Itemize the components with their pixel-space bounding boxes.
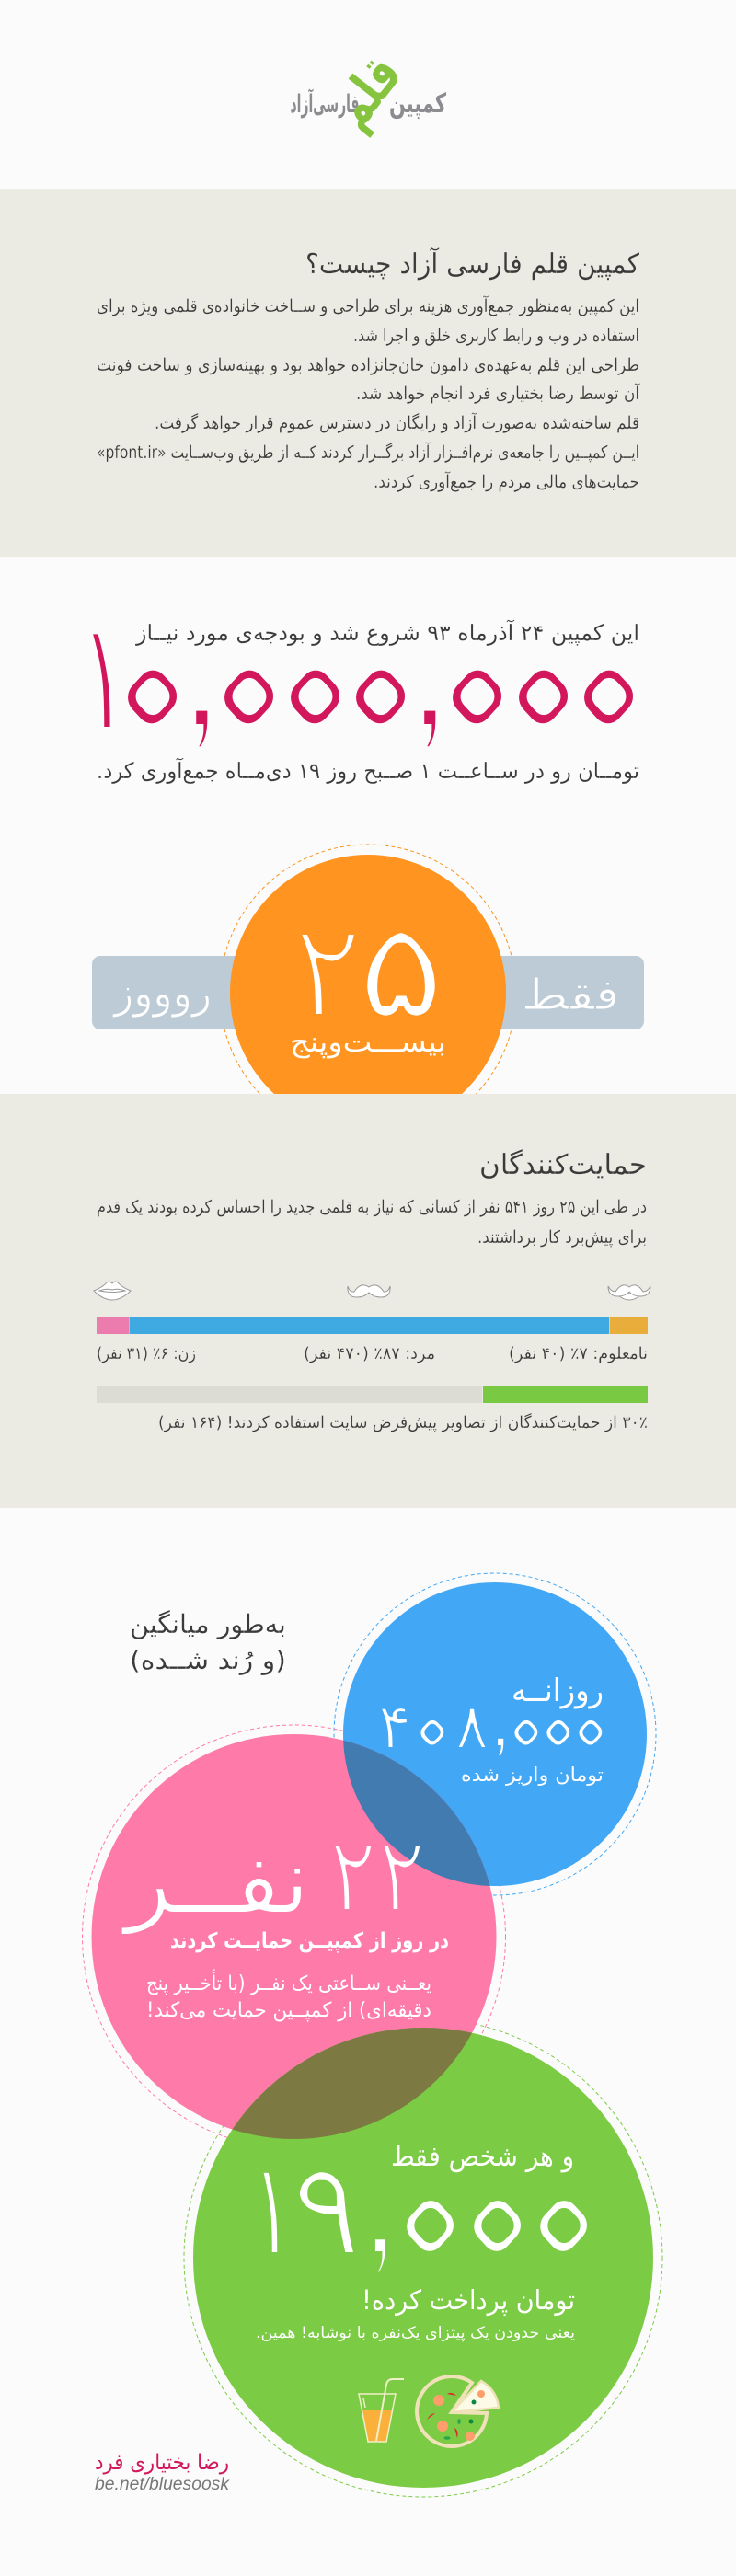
- heading: on average: [130, 1609, 286, 1675]
- number: 25: [302, 933, 435, 1016]
- panel: what is the campaign: [0, 189, 736, 557]
- number: 408,000: [378, 1676, 625, 1764]
- heading: on average: به‌طور میانگین: [130, 1609, 286, 1639]
- big number: ten million: ۱: [75, 587, 133, 767]
- text block: per person: تومان پرداخت کرده!: [362, 2284, 575, 2317]
- big number: ten million: ۰: [546, 618, 681, 765]
- number: 408,000: ۰: [561, 1696, 625, 1764]
- icon: drink: [359, 2379, 404, 2442]
- big number: ten million: ۰: [317, 618, 453, 765]
- text block: campaign description: آن توسط رضا بختیاری فرد انجام خواهد شد.: [356, 382, 640, 404]
- icon: moustache and lips: [608, 1285, 650, 1300]
- text block: collection date: تومــان رو در ســاعــت ۱ صــبح روز ۱۹ دی‌مــاه جمع‌آوری کرد.: [97, 757, 639, 784]
- legend: gender labels: نامعلوم: ۷٪ (۴۰ نفر): [509, 1344, 648, 1363]
- text block: campaign description: این کمپین به‌منظور جمع‌آوری هزینه برای طراحی و ســاخت خانواده‌ی قلمی ویژه برای: [97, 294, 639, 316]
- logo: فارسی‌آزاد: [291, 88, 359, 119]
- label: days: روووز: [112, 968, 212, 1018]
- logo: [291, 43, 446, 140]
- big number: ten million: ,: [406, 569, 454, 765]
- big number: ten million: ۰: [89, 618, 224, 765]
- number: 25: ۵: [356, 893, 446, 1048]
- number: 408,000: ۰: [497, 1696, 560, 1764]
- text block: campaign description: قلم ساخته‌شده به‌صورت آزاد و رایگان در دسترس عموم قرار خواهد گرفت.: [155, 411, 639, 433]
- text block: daily supporters: نفــر: [121, 1827, 310, 1935]
- overlap: pink and green: [232, 2028, 472, 2139]
- text block: daily supporters: در روز از کمپیــن حمایــت کردند: [170, 1929, 449, 1953]
- credit: author: be.net/bluesoosk: [95, 2475, 231, 2494]
- text block: per person: یعنی حدودن یک پیتزای یک‌نفره با نوشابه! همین.: [256, 2324, 575, 2342]
- number: 408,000: ۸: [455, 1691, 489, 1764]
- circle: daily supporters: [92, 1734, 497, 2139]
- text block: per person: [251, 2110, 633, 2342]
- legend: gender labels: مرد: ۸۷٪ (۴۷۰ نفر): [304, 1344, 435, 1363]
- text block: supporters description: برای پیش‌برد کار برداشتند.: [477, 1227, 647, 1248]
- text block: daily supporters: دقیقه‌ای) از کمپــین حمایت می‌کند!: [146, 1999, 431, 2022]
- text block: daily supporters: یعــنی ســاعتی یک نفــر (با تأخــیر پنج: [146, 1969, 431, 1995]
- number: 408,000: ۰: [529, 1696, 592, 1764]
- circle: daily amount: [343, 1582, 647, 1886]
- text block: daily amount: [378, 1673, 625, 1786]
- text block: campaign description: حمایت‌های مالی مردم را جمع‌آوری کردند.: [374, 470, 639, 492]
- heading: supporters: حمایت‌کنندگان: [479, 1149, 647, 1181]
- circle: per person: [193, 2028, 653, 2488]
- text block: supporters description: در طی این ۲۵ روز ۵۴۱ نفر از کسانی که نیاز به قلمی جدید را احساس کرده بودند یک قدم: [97, 1197, 647, 1217]
- big number: ten million: ۰: [252, 618, 387, 765]
- label: only: فقط: [521, 970, 620, 1019]
- label: twenty five: بیســـت‌وپنج: [290, 1027, 446, 1059]
- text block: daily amount: تومان واریز شده: [461, 1764, 604, 1786]
- bar chart: gender split: [97, 1317, 648, 1334]
- heading: on average: (و رُند شــده): [130, 1645, 286, 1675]
- text block: campaign description: طراحی این قلم به‌عهده‌ی دامون خان‌جانزاده خواهد بود و بهینه‌سازی و ساخت فونت: [97, 355, 639, 375]
- number: 19,000: ۹: [292, 2133, 362, 2285]
- number: 25: ۲: [292, 893, 363, 1049]
- number: 408,000: ۰: [403, 1696, 466, 1764]
- text block: daily supporters: ۲۲: [328, 1813, 426, 1937]
- text block: supporters description: [97, 1197, 647, 1248]
- big number: ten million: ,: [178, 569, 225, 765]
- overlap: blue and pink: [343, 1741, 489, 1886]
- icon: moustache: [348, 1285, 390, 1297]
- number: 19,000: [251, 2110, 633, 2291]
- number: 19,000: ۱: [251, 2133, 293, 2285]
- text block: campaign description: استفاده در وب و رابط کاربری خلق و اجرا شد.: [353, 326, 639, 346]
- text block: campaign description: ایــن کمپــین را جامعه‌ی نرم‌افــزار آزاد برگــزار کردند کــه از طریق وب‌ســایت «pfont.ir»: [97, 441, 639, 463]
- big number: ten million: [75, 569, 681, 767]
- text block: per person: و هر شخص فقط: [391, 2141, 574, 2173]
- icon: pizza: [417, 2376, 499, 2446]
- text block: campaign description: [97, 294, 640, 492]
- logo: کمپین: [389, 87, 446, 120]
- big number: ten million: ۰: [414, 618, 549, 765]
- big number: ten million: ۰: [480, 618, 615, 765]
- logo: قلم: [319, 43, 414, 140]
- number: 408,000: ۴: [378, 1691, 411, 1764]
- number: 19,000: ,: [358, 2110, 402, 2289]
- number: 19,000: ۰: [437, 2151, 567, 2291]
- credit: author: [95, 2451, 231, 2494]
- badge: only 25 days: [92, 845, 644, 1094]
- text block: default images note: ۳۰٪ از حمایت‌کنندگان از تصاویر پیش‌فرض سایت استفاده کردند! (۱۶۴ نفر): [158, 1412, 648, 1432]
- number: 19,000: ۰: [503, 2151, 633, 2291]
- number: 408,000: ,: [489, 1676, 512, 1764]
- bar chart: default images share: [97, 1386, 648, 1403]
- number: 19,000: ۰: [370, 2151, 500, 2291]
- big number: ten million: ۰: [186, 618, 321, 765]
- panel: supporters: [0, 1094, 736, 1508]
- text block: daily supporters: [121, 1813, 449, 2022]
- decorative dashed rings and circles: [83, 1573, 662, 2497]
- legend: gender labels: [97, 1344, 648, 1363]
- text block: budget intro: این کمپین ۲۴ آذرماه ۹۳ شروع شد و بودجه‌ی مورد نیــاز: [135, 619, 639, 646]
- heading: what is the campaign: کمپین قلم فارسی آزاد چیست؟: [305, 247, 640, 281]
- icon: lips: [94, 1282, 131, 1300]
- text block: daily amount: روزانــه: [512, 1673, 604, 1709]
- credit: author: رضا بختیاری فرد: [95, 2451, 229, 2475]
- legend: gender labels: زن: ۶٪ (۳۱ نفر): [97, 1344, 196, 1363]
